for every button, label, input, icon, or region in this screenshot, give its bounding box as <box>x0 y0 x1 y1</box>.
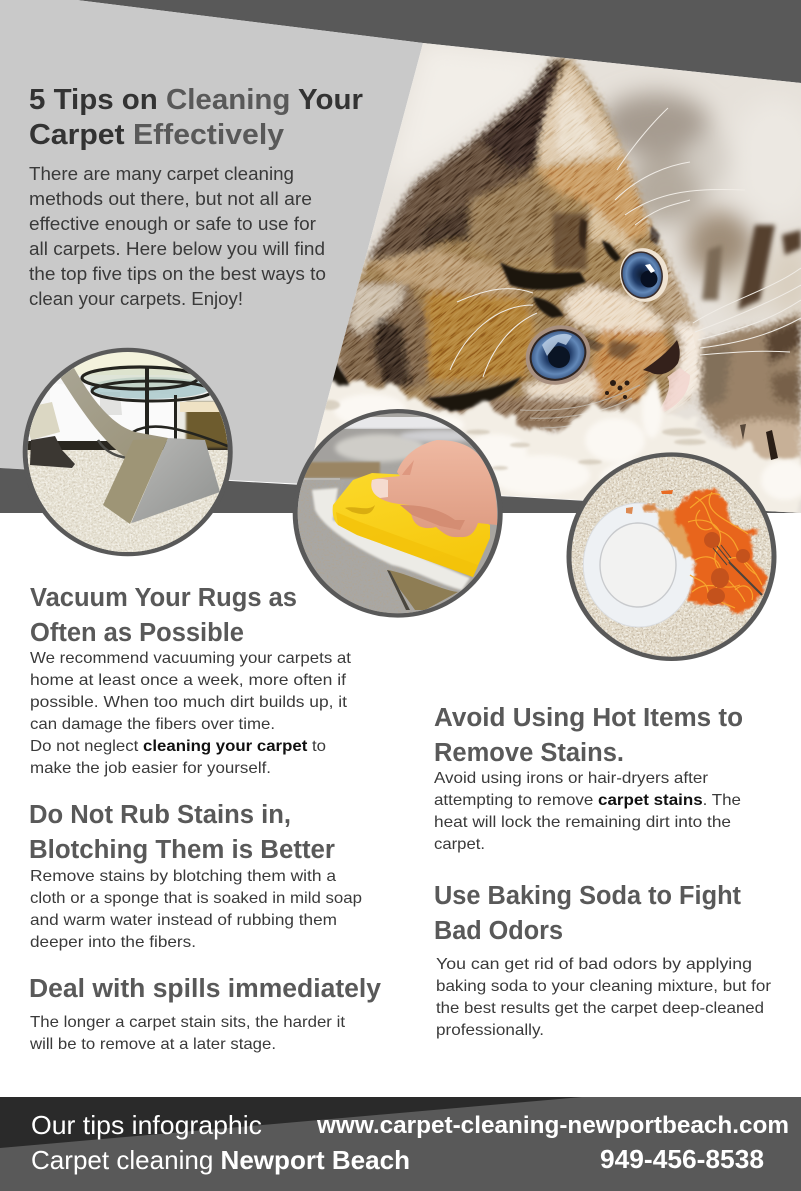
sponge <box>333 473 490 577</box>
intro paragraph: the top five tips on the best ways to <box>29 264 326 284</box>
hand <box>371 440 497 537</box>
head stripes <box>328 218 660 412</box>
tip 5: baking soda <box>434 882 771 1039</box>
intro paragraph: There are many carpet cleaning <box>29 164 294 184</box>
text: baking soda <box>436 956 771 1039</box>
text: hot items <box>434 770 741 853</box>
plate <box>583 503 695 627</box>
footer: tagline <box>31 1110 410 1175</box>
title <box>29 84 363 151</box>
heading: baking soda <box>434 882 741 945</box>
text: spills: The longer a carpet stain sits, the harder it <box>30 1014 346 1031</box>
lower dark band <box>0 468 801 513</box>
whiskers <box>450 108 801 428</box>
muzzle dots <box>605 380 630 399</box>
text: hot items: carpet. <box>434 836 485 853</box>
tip 4: avoid hot items <box>434 704 743 853</box>
carpet <box>28 450 228 552</box>
side table <box>186 402 232 448</box>
blurred back fur <box>385 43 801 320</box>
wet carpet <box>298 480 468 614</box>
nozzle side <box>131 438 220 523</box>
eye: left <box>526 325 590 385</box>
heading: baking soda: Bad Odors <box>434 917 563 945</box>
footer band <box>0 1097 801 1191</box>
spaghetti <box>675 488 768 615</box>
text: vacuum <box>30 650 352 777</box>
heading: do not rub: Do Not Rub Stains in, <box>29 801 291 829</box>
intro paragraph <box>29 164 326 309</box>
text: spills <box>29 1014 346 1053</box>
body and paw <box>695 312 801 470</box>
heading: vacuum: Vacuum Your Rugs as <box>30 584 297 612</box>
text: vacuum: We recommend vacuuming your carpets at <box>30 650 352 667</box>
tip 1: vacuum your rugs <box>30 584 352 777</box>
text: baking soda: baking soda to your cleaning mixture, but for <box>436 978 771 995</box>
heading: hot items <box>434 704 743 767</box>
heading: spills: Deal with spills immediately <box>29 975 382 1003</box>
kitten head <box>332 44 796 513</box>
vacuum hose <box>60 368 168 462</box>
heading: vacuum: Often as Possible <box>30 619 244 647</box>
text: vacuum: make the job easier for yourself. <box>30 760 271 777</box>
footer: tagline: Carpet cleaning Newport Beach <box>31 1145 410 1175</box>
heading: do not rub: Blotching Them is Better <box>29 836 335 864</box>
text: do not rub: Remove stains by blotching them with a <box>30 868 336 885</box>
text: vacuum: possible. When too much dirt builds up, it <box>30 694 348 711</box>
text: hot items: attempting to remove carpet stains . The <box>434 792 741 809</box>
footer: website and phone: 949-456-8538 <box>600 1144 764 1174</box>
photo circle: yellow sponge on a stained carpet <box>290 405 505 625</box>
sauce on plate <box>657 510 695 558</box>
top dark band <box>77 0 801 83</box>
title: 5 Tips on Cleaning Your <box>29 84 363 116</box>
intro paragraph: effective enough or safe to use for <box>29 214 316 234</box>
text: spills: will be to remove at a later stage. <box>29 1036 276 1053</box>
heading: hot items: Remove Stains. <box>434 739 624 767</box>
text: vacuum: can damage the fibers over time. <box>30 716 275 733</box>
head fur texture <box>338 58 700 422</box>
tip 2: do not rub stains <box>29 801 362 951</box>
text: do not rub <box>30 868 362 951</box>
ear inner <box>538 60 623 168</box>
nose <box>643 340 680 374</box>
text: do not rub: and warm water instead of rubbing them <box>30 912 337 929</box>
footer: website and phone: www.carpet-cleaning-newportbeach.com <box>316 1112 789 1139</box>
text: hot items: heat will lock the remaining dirt into the <box>434 814 731 831</box>
photo: kitten lying on a white carpet <box>314 43 801 513</box>
intro paragraph: all carpets. Here below you will find <box>29 239 325 259</box>
light grey intro panel <box>0 0 423 484</box>
fork <box>713 545 762 595</box>
text: do not rub: deeper into the fibers. <box>30 934 196 951</box>
heading: vacuum <box>30 584 297 647</box>
title: Carpet Effectively <box>29 119 284 151</box>
hole in carpet <box>387 570 458 610</box>
trouser and shoe <box>28 402 60 440</box>
text: baking soda: professionally. <box>436 1022 544 1039</box>
text: vacuum: home at least once a week, more often if <box>30 672 347 689</box>
heading: do not rub <box>29 801 335 864</box>
footer: tagline: Our tips infographic <box>31 1110 262 1140</box>
footer: website and phone <box>316 1112 789 1174</box>
tip 3: deal with spills <box>29 975 382 1053</box>
white shag carpet <box>314 376 801 512</box>
heading: baking soda: Use Baking Soda to Fight <box>434 882 741 910</box>
meatballs <box>704 532 750 604</box>
photo circle: carpet steam-cleaning nozzle <box>20 345 235 560</box>
text: hot items: Avoid using irons or hair-dryers after <box>434 770 708 787</box>
text: baking soda: You can get rid of bad odors by applying <box>436 956 752 973</box>
text: do not rub: cloth or a sponge that is soaked in mild soap <box>30 890 362 907</box>
photo circle: spilled spaghetti and plate on carpet <box>565 450 780 665</box>
intro paragraph: clean your carpets. Enjoy! <box>29 289 243 309</box>
nozzle front <box>103 438 168 524</box>
glass table <box>90 377 210 399</box>
intro paragraph: methods out there, but not all are <box>29 189 312 209</box>
text: baking soda: the best results get the carpet deep-cleaned <box>436 1000 764 1017</box>
heading: hot items: Avoid Using Hot Items to <box>434 704 743 732</box>
eye: right <box>620 248 668 302</box>
text: vacuum: Do not neglect cleaning your carpet to <box>30 738 326 755</box>
claw detail <box>740 424 778 460</box>
